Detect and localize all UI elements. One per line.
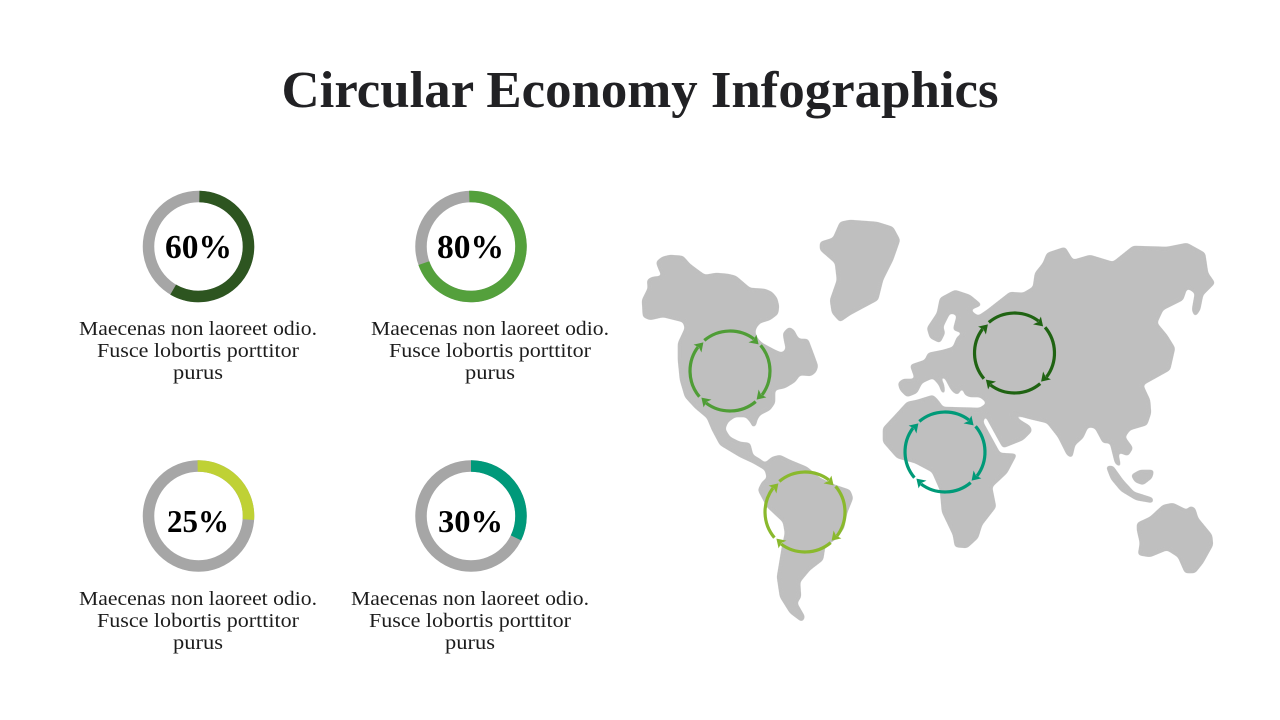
donut chart: 25% [148, 465, 249, 567]
description: 30% [351, 588, 589, 654]
description: 80%: purus [465, 362, 515, 384]
value: 80%: 80% [437, 229, 504, 266]
donut chart: 60% [148, 196, 249, 297]
description: 80%: Fusce lobortis porttitor [389, 340, 591, 362]
description: 60%: purus [173, 362, 223, 384]
description: 30%: purus [445, 632, 495, 654]
landmass: Borneo [1131, 470, 1154, 485]
description: 25%: Fusce lobortis porttitor [97, 610, 299, 632]
value: 30%: 30% [438, 503, 503, 539]
description: 25%: purus [173, 632, 223, 654]
map landmasses [642, 220, 1215, 622]
donut chart: 80% [419, 195, 523, 298]
description: 80% [371, 318, 609, 384]
donut chart: 30% [421, 466, 521, 566]
description: 30%: Fusce lobortis porttitor [369, 610, 571, 632]
recycle arrows: Eurasia [975, 313, 1054, 393]
recycle arrows: Africa [905, 412, 985, 492]
description: 25%: Maecenas non laoreet odio. [79, 588, 317, 610]
panel: 25% stat [79, 465, 317, 654]
description: 60% [79, 318, 317, 384]
landmass: Africa [883, 395, 1017, 548]
value: 25%: 25% [167, 503, 229, 539]
panel: 60% stat [79, 196, 317, 384]
description: 30%: Maecenas non laoreet odio. [351, 588, 589, 610]
panel: 30% stat [351, 466, 589, 654]
description: 60%: Maecenas non laoreet odio. [79, 318, 317, 340]
description: 80%: Maecenas non laoreet odio. [371, 318, 609, 340]
landmass: the Americas [642, 255, 853, 622]
landmass: Greenland [820, 220, 900, 322]
value: 60%: 60% [165, 229, 232, 266]
landmass: Australia [1137, 503, 1213, 573]
panel: 80% stat [371, 195, 609, 384]
landmass: Eurasia [898, 243, 1215, 468]
recycle arrows: South America [765, 472, 845, 552]
description: 60%: Fusce lobortis porttitor [97, 340, 299, 362]
world map [642, 220, 1215, 622]
description: 25% [79, 588, 317, 654]
recycle arrows: North America [690, 331, 770, 411]
landmass: Sumatra and Java [1106, 466, 1153, 503]
title: Circular Economy Infographics [282, 62, 998, 119]
